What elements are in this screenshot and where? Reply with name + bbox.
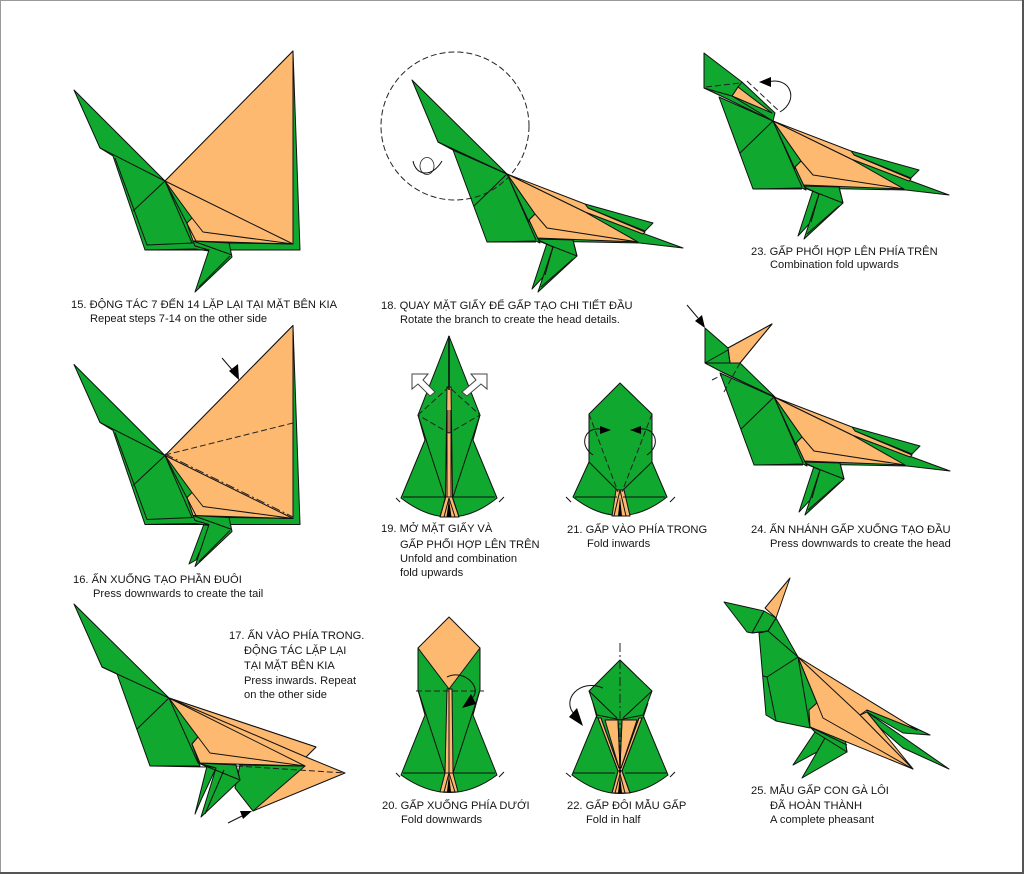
step 24 caption xyxy=(751,522,951,550)
step 15 caption: Repeat steps 7-14 on the other side xyxy=(90,313,267,325)
step 25 caption: A complete pheasant xyxy=(770,814,875,826)
step 23 caption: Combination fold upwards xyxy=(770,259,899,271)
step 17 caption: 17. ẤN VÀO PHÍA TRONG. xyxy=(229,629,364,642)
step 22 caption xyxy=(567,799,686,826)
step 23 caption xyxy=(751,244,938,271)
step 21 diagram xyxy=(566,383,675,516)
step 20 caption: Fold downwards xyxy=(401,814,483,826)
step 19 caption: 19. MỞ MẶT GIẤY VÀ xyxy=(381,522,493,535)
step 21 caption: Fold inwards xyxy=(587,538,651,550)
step 25 caption xyxy=(751,784,889,826)
arrow: press down xyxy=(222,358,239,380)
step 23 diagram xyxy=(704,53,949,239)
step 19 caption: Unfold and combination xyxy=(400,553,517,565)
step 16 diagram xyxy=(74,326,300,566)
step 24 diagram xyxy=(687,305,950,515)
step 17 diagram xyxy=(74,604,345,823)
step 15 diagram xyxy=(74,51,300,292)
step 18 caption xyxy=(381,299,633,326)
step 15 caption: 15. ĐỘNG TÁC 7 ĐẾN 14 LẶP LẠI TẠI MẶT BÊN KIA xyxy=(71,298,338,311)
step 25 caption: ĐÃ HOÀN THÀNH xyxy=(770,799,862,812)
step 20 caption: 20. GẤP XUỐNG PHÍA DƯỚI xyxy=(382,798,530,812)
step 20 caption xyxy=(382,798,530,826)
step 24 caption: Press downwards to create the head xyxy=(770,538,951,550)
step 16 caption xyxy=(73,572,263,600)
step 17 caption: ĐỘNG TÁC LẶP LẠI xyxy=(244,644,346,657)
step 22 diagram xyxy=(566,643,675,794)
step 25 caption: 25. MẪU GẤP CON GÀ LÔI xyxy=(751,784,889,797)
step 18 diagram xyxy=(381,52,683,292)
step 17 caption: TẠI MẶT BÊN KIA xyxy=(244,659,335,672)
arrow: fold in half xyxy=(569,685,603,726)
arrow: fold down xyxy=(447,675,476,708)
icon: rotate symbol xyxy=(413,158,442,174)
step 22 caption: Fold in half xyxy=(586,814,641,826)
step 23 caption: 23. GẤP PHỐI HỢP LÊN PHÍA TRÊN xyxy=(751,244,938,258)
hollow arrow right xyxy=(462,374,487,396)
step 19 diagram xyxy=(396,336,504,517)
step 25 diagram xyxy=(724,578,949,778)
step 18 caption: Rotate the branch to create the head details. xyxy=(400,314,620,326)
step 20 diagram xyxy=(396,617,504,792)
step 24 caption: 24. ẤN NHÁNH GẤP XUỐNG TẠO ĐẦU xyxy=(751,522,951,536)
step 17 caption: Press inwards. Repeat xyxy=(244,675,357,687)
step 19 caption: fold upwards xyxy=(400,567,464,579)
arrow: fold inwards right xyxy=(630,426,655,455)
step 16 caption: 16. ẤN XUỐNG TẠO PHẦN ĐUÔI xyxy=(73,572,242,586)
step 21 caption xyxy=(567,523,707,550)
hollow arrow left xyxy=(412,374,435,396)
step 17 caption xyxy=(229,629,364,701)
step 19 caption: GẤP PHỐI HỢP LÊN TRÊN xyxy=(400,537,540,551)
dashed rotation circle xyxy=(381,52,529,200)
step 21 caption: 21. GẤP VÀO PHÍA TRONG xyxy=(567,523,707,536)
arrow: fold inwards left xyxy=(585,426,611,455)
arrow: fold up xyxy=(759,77,791,112)
arrow: press inwards xyxy=(228,811,252,823)
step 15 caption xyxy=(71,298,338,325)
arrow: press head xyxy=(687,305,705,328)
step 18 caption: 18. QUAY MẶT GIẤY ĐỂ GẤP TẠO CHI TIẾT ĐẦU xyxy=(381,299,633,312)
step 16 caption: Press downwards to create the tail xyxy=(93,588,263,600)
step 22 caption: 22. GẤP ĐÔI MẪU GẤP xyxy=(567,799,686,812)
step 17 caption: on the other side xyxy=(244,689,327,701)
step 19 caption xyxy=(381,522,540,579)
